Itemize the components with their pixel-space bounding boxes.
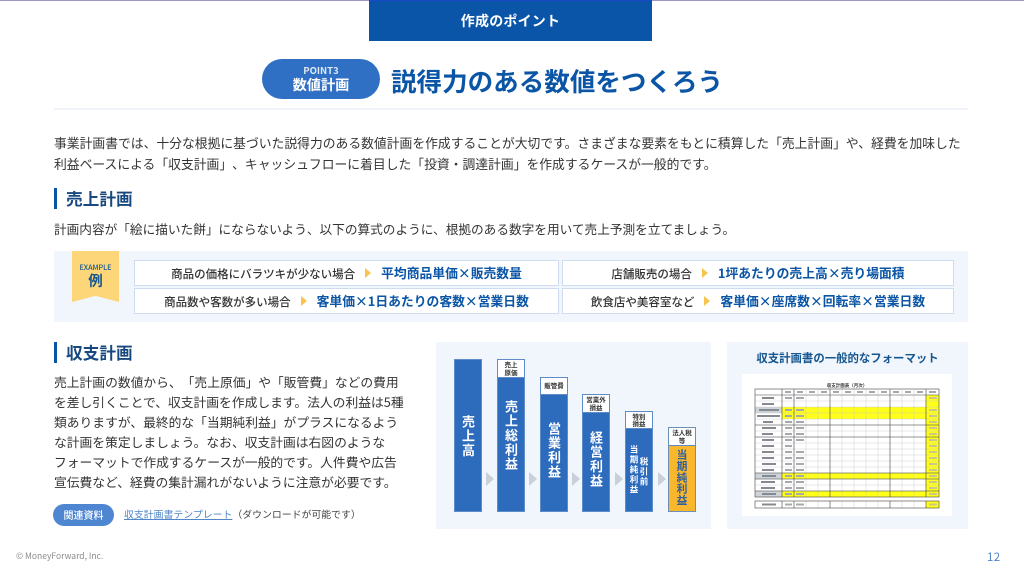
example ribbon: 例 (88, 270, 103, 291)
formula 4: 飲食店や美容室など 客単価×座席数×回転率×営業日数 (591, 291, 925, 310)
header tab: 作成のポイント (461, 11, 560, 31)
sales plan text: 計画内容が「絵に描いた餅」にならないよう、以下の算式のように、根拠のある数字を用いて売上予測を立てましょう。 (54, 219, 735, 238)
bar: pre-tax profit: 特別 (632, 410, 646, 420)
formula 2 (134, 288, 559, 314)
bar: pre-tax profit: 損益 (632, 418, 646, 428)
panel: examples (54, 251, 968, 322)
bar: net profit: 法人税 (672, 427, 692, 437)
income plan text: 類ありますが、最終的な「当期純利益」がプラスになるよう (54, 412, 398, 431)
bar: ordinary profit: 営業外 (586, 394, 606, 404)
title divider (54, 108, 968, 110)
formula 1 (134, 260, 559, 286)
bar: operating profit: 営業利益 (545, 422, 564, 480)
bar: ordinary profit: 経営利益 (587, 431, 606, 489)
intro text (54, 133, 961, 172)
related link: 収支計画書テンプレート（ダウンロードが可能です） (124, 507, 361, 521)
bar: gross profit: 売上 (504, 359, 518, 369)
bar: ordinary profit (582, 394, 610, 512)
point badge: POINT3 (303, 63, 339, 77)
format table image: 収支計画表（月次） (827, 382, 867, 389)
arrow (529, 472, 537, 486)
bar: pre-tax profit: 当期純利益 (628, 445, 640, 495)
bar: sales (454, 359, 482, 512)
title: 説得力のある数値をつくろう (391, 62, 723, 99)
example ribbon: EXAMPLE (79, 263, 112, 273)
bar: pre-tax profit: 税引前 (638, 457, 650, 487)
bar: net profit (668, 427, 696, 512)
panel: format (727, 342, 968, 529)
bar: operating profit (540, 377, 568, 512)
header tab (369, 0, 652, 41)
income plan text: な計画を策定しましょう。なお、収支計画は右図のような (54, 432, 385, 451)
panel: profit waterfall (436, 342, 711, 529)
format table image (742, 374, 952, 516)
arrow (615, 472, 623, 486)
format heading: 収支計画書の一般的なフォーマット (756, 350, 939, 366)
page number: 12 (987, 549, 1001, 565)
formula 2: 商品数や客数が多い場合 客単価×1日あたりの客数×営業日数 (164, 291, 529, 310)
copyright: © MoneyForward, Inc. (16, 550, 103, 562)
bar: gross profit (497, 359, 525, 512)
bar: pre-tax profit (625, 411, 653, 512)
heading: income plan: 収支計画 (66, 340, 133, 364)
income plan text: を差し引くことで、収支計画を作成します。法人の利益は5種 (54, 392, 404, 411)
arrow (486, 472, 494, 486)
formula 3: 店舗販売の場合 1坪あたりの売上高×売り場面積 (611, 263, 905, 282)
income plan text (54, 372, 404, 491)
bar: gross profit: 売上総利益 (502, 400, 521, 472)
related badge: 関連資料 (64, 507, 104, 522)
bar: net profit: 等 (679, 434, 685, 444)
income plan text: 宣伝費など、経費の集計漏れがないように注意が必要です。 (54, 472, 397, 491)
top rule (0, 0, 1024, 1)
bar: operating profit: 販管費 (544, 380, 564, 390)
intro text: 利益ベースによる「収支計画」、キャッシュフローに着目した「投資・調達計画」を作成するケースが一般的です。 (54, 154, 716, 172)
intro text: 事業計画書では、十分な根拠に基づいた説得力のある数値計画を作成することが大切です。さまざまな要素をもとに積算した「売上計画」や、経費を加味した (54, 133, 961, 152)
arrow (572, 472, 580, 486)
formula 1: 商品の価格にバラツキが少ない場合 平均商品単価×販売数量 (171, 263, 522, 282)
example ribbon (72, 251, 119, 302)
bar: sales: 売上高 (459, 415, 478, 457)
point badge: 数値計画 (293, 75, 349, 95)
related badge (53, 504, 114, 526)
income plan text: 売上計画の数値から、「売上原価」や「販管費」などの費用 (54, 372, 399, 391)
bar: ordinary profit: 損益 (590, 402, 602, 412)
bar: net profit: 当期純利益 (674, 448, 690, 506)
income plan text: フォーマットで作成するケースが一般的です。人件費や広告 (54, 452, 397, 471)
bar: gross profit: 原価 (504, 366, 518, 376)
heading: sales plan: 売上計画 (66, 186, 133, 210)
formula 4 (562, 288, 954, 314)
formula 3 (562, 260, 954, 286)
point badge (262, 59, 380, 99)
arrow (658, 472, 666, 486)
